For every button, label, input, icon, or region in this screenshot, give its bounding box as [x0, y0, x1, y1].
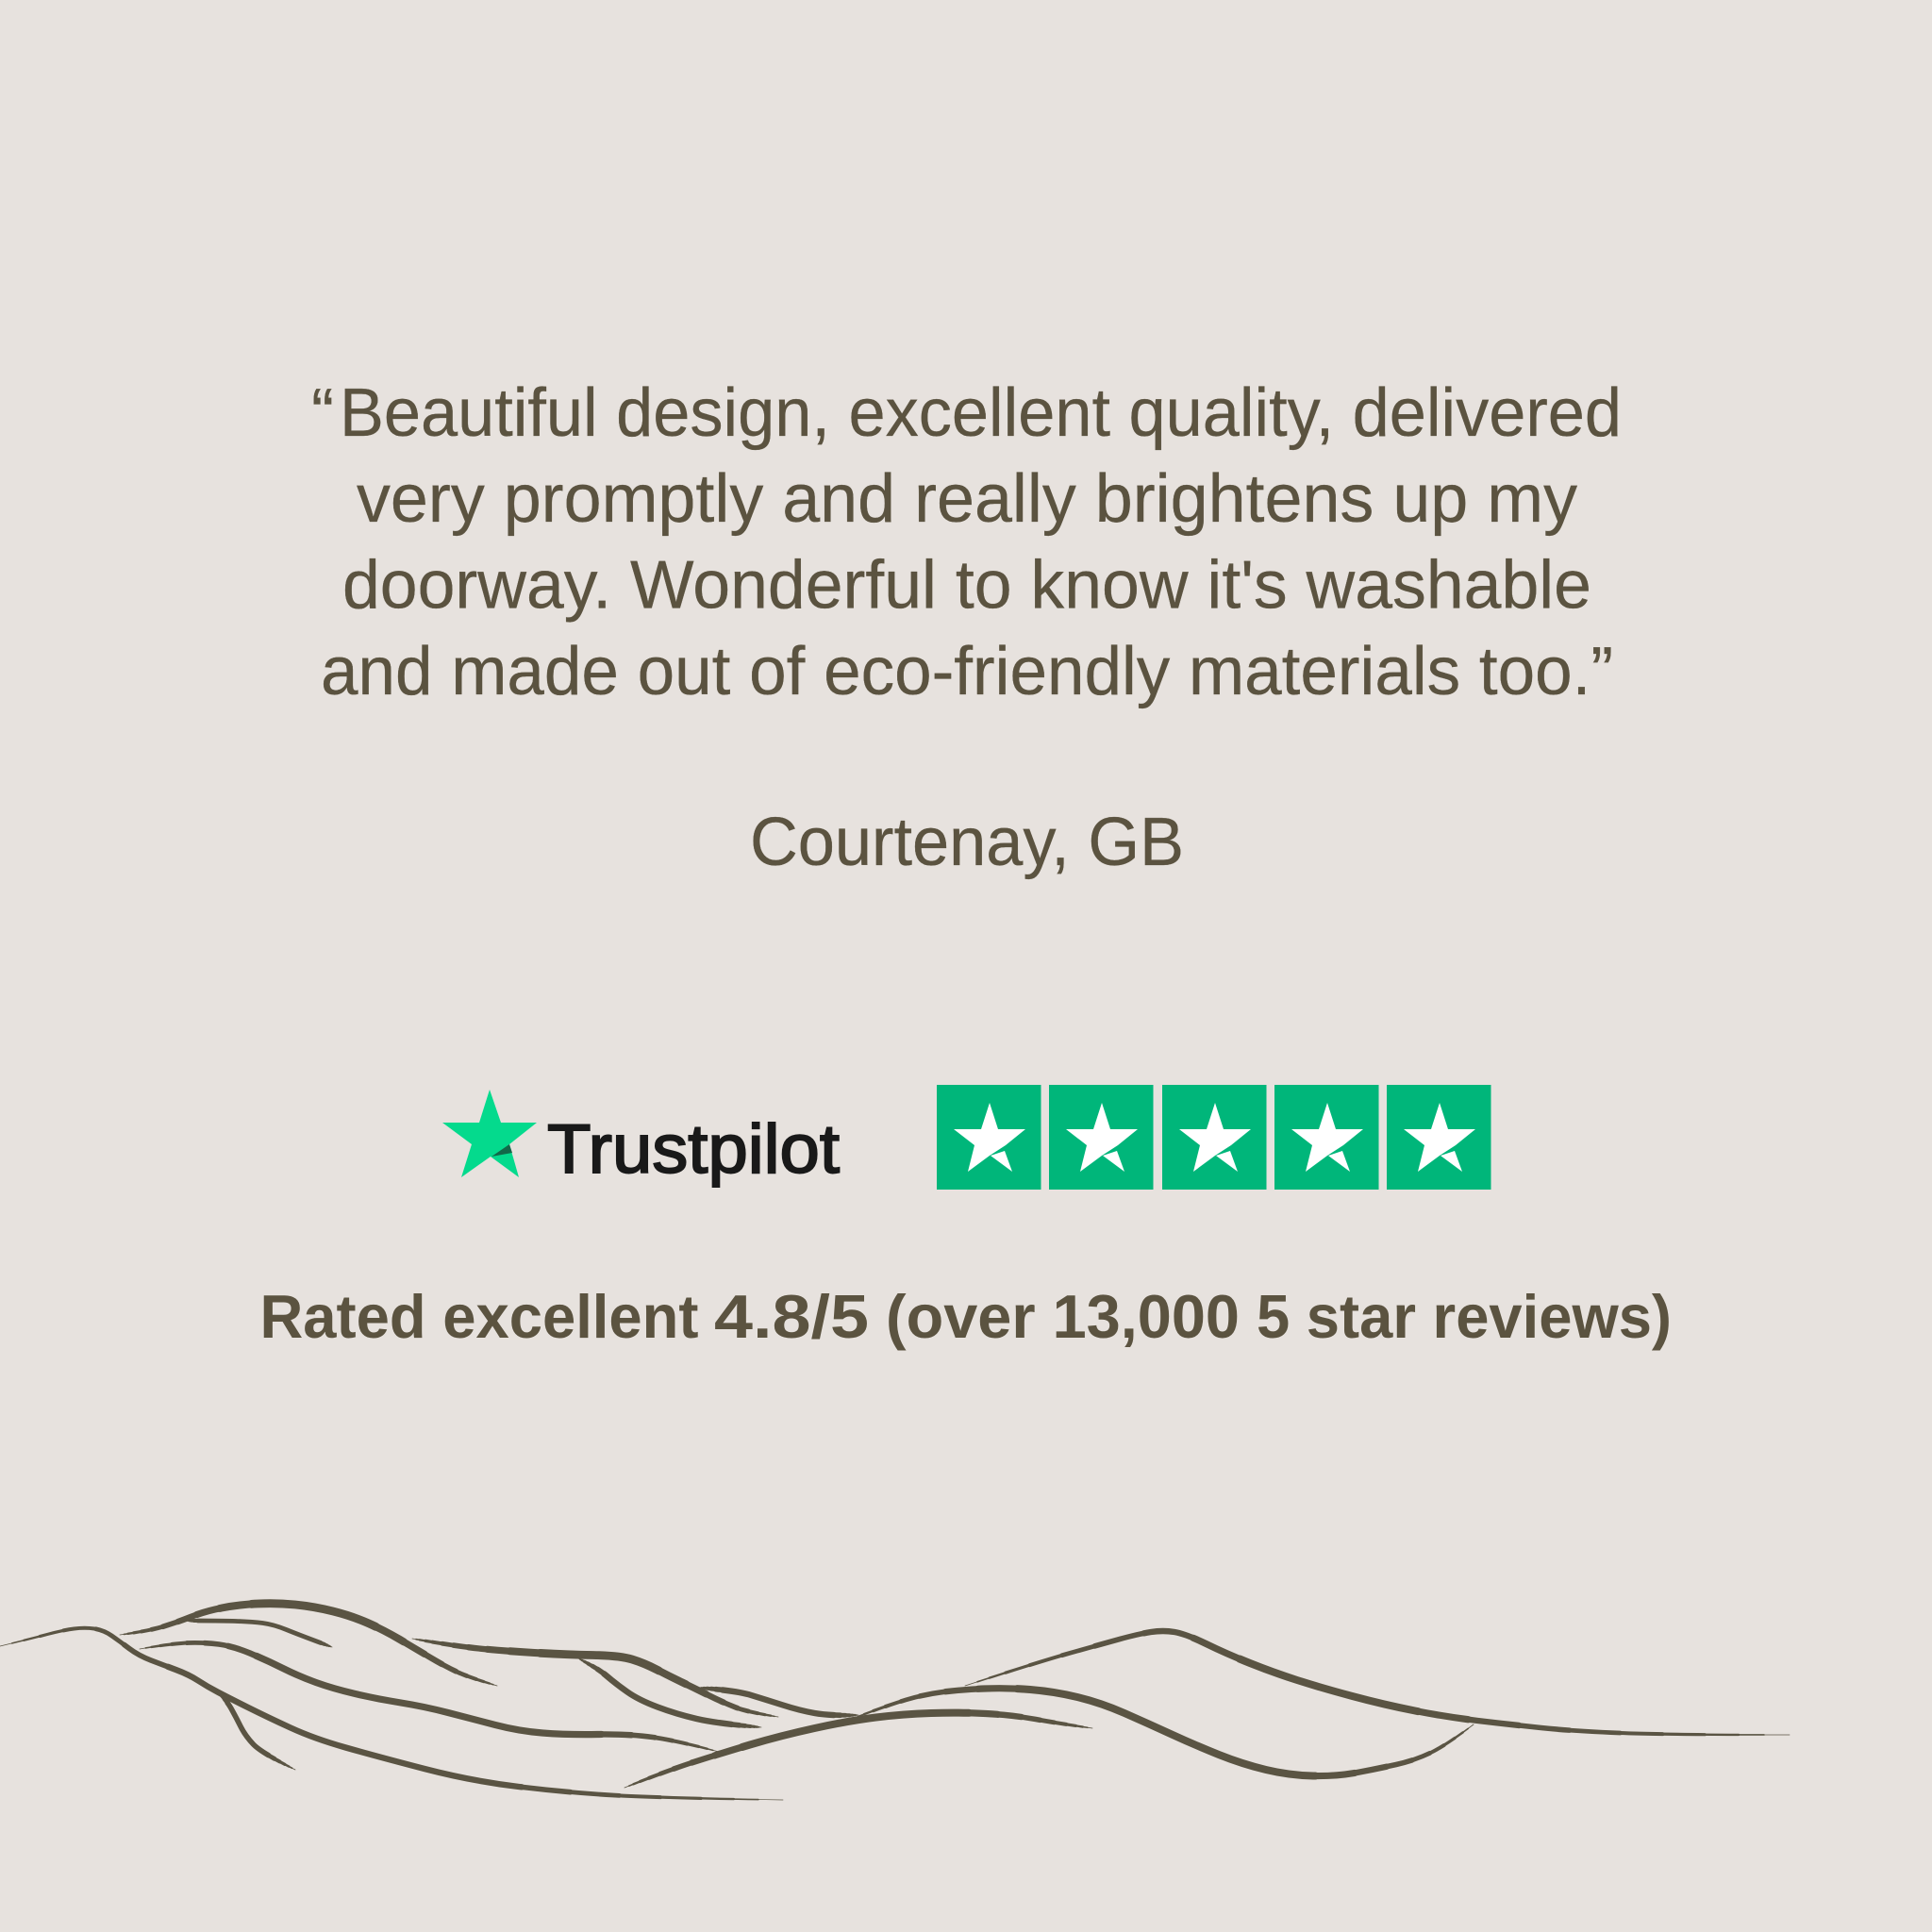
ridge: high hill	[120, 1604, 497, 1686]
review quote: doorway. Wonderful to know it's washable	[342, 547, 1591, 623]
ridge: long middle line	[140, 1642, 719, 1752]
ridge: lower hump	[625, 1713, 1092, 1788]
star box 3	[1162, 1085, 1266, 1190]
review quote	[311, 375, 1622, 709]
ridge: left branch	[215, 1689, 295, 1770]
star box 1	[937, 1085, 1041, 1190]
ridge: central slope branch	[578, 1658, 761, 1727]
ridge: high hill inner line	[186, 1621, 332, 1647]
star box 5	[1387, 1085, 1491, 1190]
rating summary	[260, 1282, 1672, 1351]
rating summary: Rated excellent	[260, 1282, 698, 1351]
Trustpilot logo	[442, 1090, 840, 1188]
review quote: and made out of eco-friendly materials too.”	[321, 634, 1613, 709]
rating summary: (over 13,000	[886, 1282, 1240, 1351]
rating summary: 5 star reviews)	[1257, 1282, 1672, 1351]
review quote: “	[311, 375, 334, 451]
ridge: valley link	[698, 1688, 858, 1715]
ridge: central slope	[412, 1639, 778, 1717]
ridge: left mountain	[0, 1628, 783, 1800]
line art: mountains	[0, 1604, 1790, 1800]
review quote: Beautiful design, excellent quality, delivered	[340, 375, 1622, 451]
reviewer name: Courtenay, GB	[750, 805, 1184, 880]
five star rating	[937, 1085, 1491, 1190]
Trustpilot wordmark: Trustpilot	[547, 1111, 840, 1188]
review quote: very promptly and really brightens up my	[357, 461, 1577, 537]
star box 2	[1049, 1085, 1153, 1190]
icon: Trustpilot star	[442, 1090, 537, 1177]
ridge: wave to the right	[852, 1689, 1474, 1776]
ridge: right mountain	[965, 1631, 1790, 1735]
star box 4	[1274, 1085, 1379, 1190]
rating summary: 4.8/5	[714, 1282, 869, 1351]
